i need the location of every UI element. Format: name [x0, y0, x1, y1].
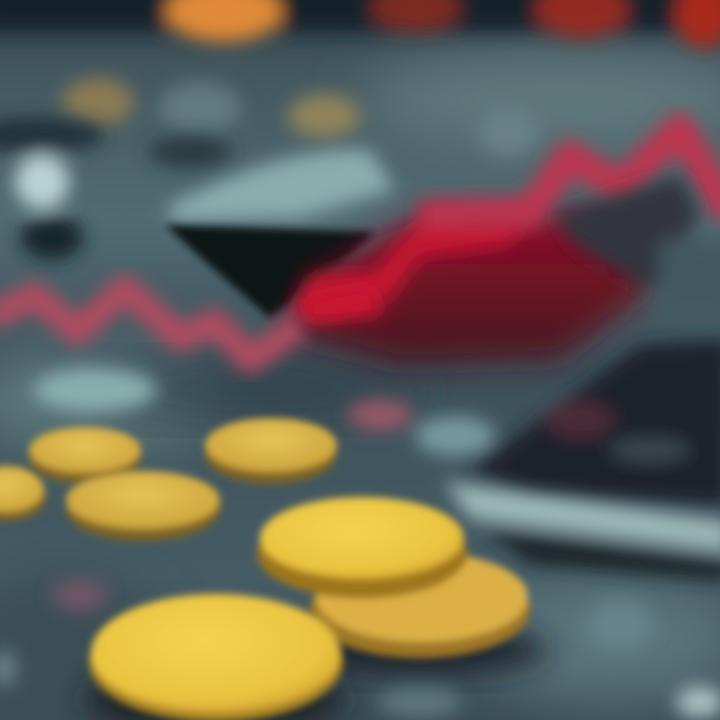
- top band of blurred lights: [0, 0, 720, 48]
- coin: far left: [0, 466, 46, 521]
- background small coins: [62, 78, 538, 156]
- shadow: [290, 626, 550, 674]
- coin: top of stack: [257, 497, 467, 598]
- foreground speckles: [0, 599, 720, 718]
- pale device edge: [445, 482, 720, 582]
- dark wedge beneath shelf: [165, 225, 375, 318]
- pale reflections mid-left: [33, 368, 495, 611]
- red area chart: [285, 212, 660, 365]
- dark object at right: [470, 175, 720, 505]
- pale shelf above chart: [170, 149, 395, 222]
- coin: upper left: [29, 427, 141, 484]
- red chart line on left: [0, 288, 300, 360]
- red chart line on right: [420, 128, 720, 215]
- small coin group: [0, 418, 337, 541]
- coin: middle left: [66, 471, 220, 541]
- large coin stack: [257, 497, 550, 674]
- coin: upper center: [205, 418, 337, 484]
- large foreground coin: [85, 594, 345, 720]
- left dark and pale blobs: [0, 117, 232, 260]
- coin: lower right: [310, 552, 530, 658]
